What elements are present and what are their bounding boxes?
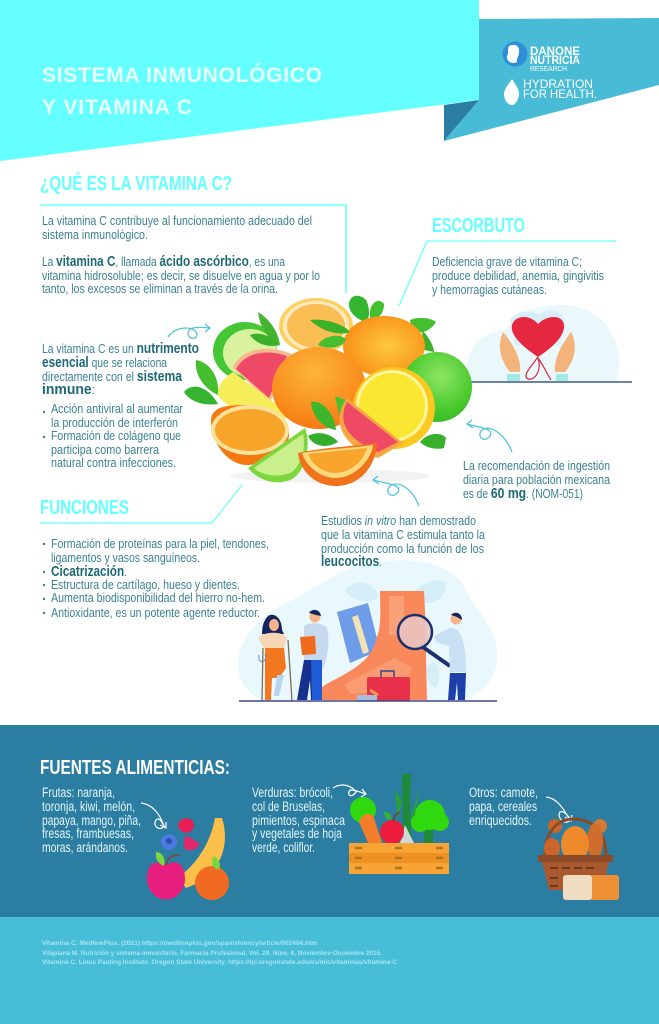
text block: funciones list: Antioxidante, es un potente agente reductor.	[51, 606, 260, 620]
text block: in vitro studies: Estudios in vitro han demostrado	[321, 514, 476, 528]
text block: funciones list: Formación de proteínas para la piel, tendones,	[51, 537, 269, 551]
band: references	[0, 917, 659, 1024]
title	[42, 63, 322, 119]
panel frame: funciones	[40, 485, 242, 523]
text block: references: Vitamina C. MedlinePlus. (2021) https://medlineplus.gov/spanish/ency/article/002404.htm	[42, 940, 317, 947]
arrow: frutas	[141, 803, 166, 828]
logo: Danone Nutricia Research: RESEARCH	[530, 66, 567, 73]
text block: references: Vitamina C. Linus Pauling Institute. Oregon State University. https://lpi.oregonstate.edu/es/mic/vitaminas/vitamina-C	[42, 959, 397, 966]
heading: fuentes alimenticias: FUENTES ALIMENTICIAS:	[40, 757, 230, 779]
arrow: recommendation to fruit	[467, 420, 512, 452]
text block: frutas: fresas, frambuesas,	[42, 826, 134, 841]
text block: in vitro studies: leucocitos.	[321, 554, 382, 570]
arrow: to fruit from nutrient text	[168, 324, 210, 338]
text block: in vitro studies	[321, 514, 485, 570]
text block: escorbuto: produce debilidad, anemia, gingivitis	[432, 269, 604, 283]
text block: introduction: La vitamina C, llamada ácido ascórbico, es una	[42, 254, 285, 270]
title: SISTEMA INMUNOLÓGICO	[42, 63, 322, 87]
text block: verduras: Verduras: brócoli,	[252, 785, 333, 800]
arrow: otros	[546, 797, 572, 822]
text block: funciones list: Cicatrización.	[51, 564, 127, 580]
illustration: heart and hands	[467, 305, 632, 382]
text block: funciones list: Estructura de cartílago, hueso y dientes.	[51, 578, 240, 592]
text block: nutrimento esencial: la producción de interferón	[51, 416, 178, 430]
text block: verduras: col de Bruselas,	[252, 799, 325, 814]
text block: otros: Otros: camote,	[469, 785, 538, 800]
text block: otros: enriquecidos.	[469, 813, 532, 828]
icon: bread basket	[538, 819, 619, 900]
panel frame: escorbuto	[399, 241, 616, 306]
text block: frutas	[42, 785, 141, 855]
text block: introduction: vitamina hidrosoluble; es decir, se disuelve en agua y por lo	[42, 269, 320, 283]
icon: fruits	[147, 818, 229, 900]
text block: nutrimento esencial: Acción antiviral al aumentar	[51, 402, 183, 416]
illustration: medical team examining foot	[238, 560, 497, 701]
heading: escorbuto: ESCORBUTO	[432, 215, 525, 237]
text block: introduction: La vitamina C contribuye al funcionamiento adecuado del	[42, 214, 312, 228]
text block: nutrimento esencial: participa como barrera	[51, 443, 159, 457]
text block: verduras: verde, coliflor.	[252, 840, 315, 855]
text block: introduction: tanto, los excesos se eliminan a través de la orina.	[42, 282, 278, 296]
logo: Hydration for Health: HYDRATION	[523, 79, 593, 91]
text block: frutas: papaya, mango, piña,	[42, 813, 141, 828]
logo: Hydration for Health	[504, 79, 597, 105]
text block: verduras: y vegetales de hoja	[252, 826, 342, 841]
logo: Danone Nutricia Research: NUTRICIA	[530, 55, 580, 67]
text block: nutrimento esencial: directamente con el sistema	[42, 369, 183, 385]
text block: nutrimento esencial: esencial que se relaciona	[42, 355, 167, 371]
text block: recommended intake	[463, 459, 610, 502]
text block: nutrimento esencial: natural contra infecciones.	[51, 456, 176, 470]
text block: in vitro studies: que la vitamina C estimula tanto la	[321, 528, 485, 542]
band: food sources	[0, 725, 659, 917]
text block: nutrimento esencial: La vitamina C es un nutrimento	[42, 341, 199, 357]
heading: funciones: FUNCIONES	[40, 497, 129, 519]
icon: vegetable crate	[349, 774, 449, 874]
text block: funciones list: ligamentos y vasos sanguíneos.	[51, 551, 200, 565]
text block: recommended intake: La recomendación de ingestión	[463, 459, 610, 473]
heading: qué es la vitamina C: ¿QUÉ ES LA VITAMINA C?	[40, 172, 232, 195]
text block: verduras	[252, 785, 345, 855]
arrow: verduras	[333, 785, 366, 797]
arrow: in vitro text to fruit	[373, 476, 419, 506]
illustration: citrus fruit pile	[184, 296, 472, 486]
text block: nutrimento esencial	[42, 341, 199, 470]
text block: escorbuto: Deficiencia grave de vitamina C;	[432, 255, 582, 269]
text block: references	[42, 940, 397, 966]
text block: funciones list: Aumenta biodisponibilidad del hierro no-hem.	[51, 591, 265, 605]
text block: introduction: sistema inmunológico.	[42, 228, 148, 242]
text block: recommended intake: diaria para población mexicana	[463, 473, 610, 487]
text block: nutrimento esencial: inmune:	[42, 382, 95, 398]
header ribbon	[0, 0, 659, 161]
text block: escorbuto	[432, 255, 604, 297]
text block: frutas: moras, arándanos.	[42, 840, 128, 855]
text block: otros	[469, 785, 538, 828]
text block: in vitro studies: producción como la función de los	[321, 542, 484, 556]
text block: funciones list	[43, 537, 269, 620]
logo: Hydration for Health: FOR HEALTH.	[523, 89, 597, 101]
text block: otros: papa, cereales	[469, 799, 537, 814]
text block: verduras: pimientos, espinaca	[252, 813, 345, 828]
text block: nutrimento esencial: Formación de colágeno que	[51, 429, 181, 443]
title: Y VITAMINA C	[42, 96, 192, 119]
logo: Danone Nutricia Research	[502, 42, 580, 73]
text block: recommended intake: es de 60 mg. (NOM-051)	[463, 485, 583, 502]
logo: Danone Nutricia Research: DANONE	[530, 46, 580, 58]
text block: references: Vilaplana M. Nutrición y sistema inmunitario. Farmacia Profesional. Vol. 29, Núm. 6, Noviembre-Diciembre 2015.	[42, 950, 382, 957]
text block: introduction	[42, 214, 320, 296]
text block: escorbuto: y hemorragias cutáneas.	[432, 283, 547, 297]
text block: frutas: toronja, kiwi, melón,	[42, 799, 135, 814]
panel frame: qué es	[40, 205, 346, 293]
text block: frutas: Frutas: naranja,	[42, 785, 115, 800]
